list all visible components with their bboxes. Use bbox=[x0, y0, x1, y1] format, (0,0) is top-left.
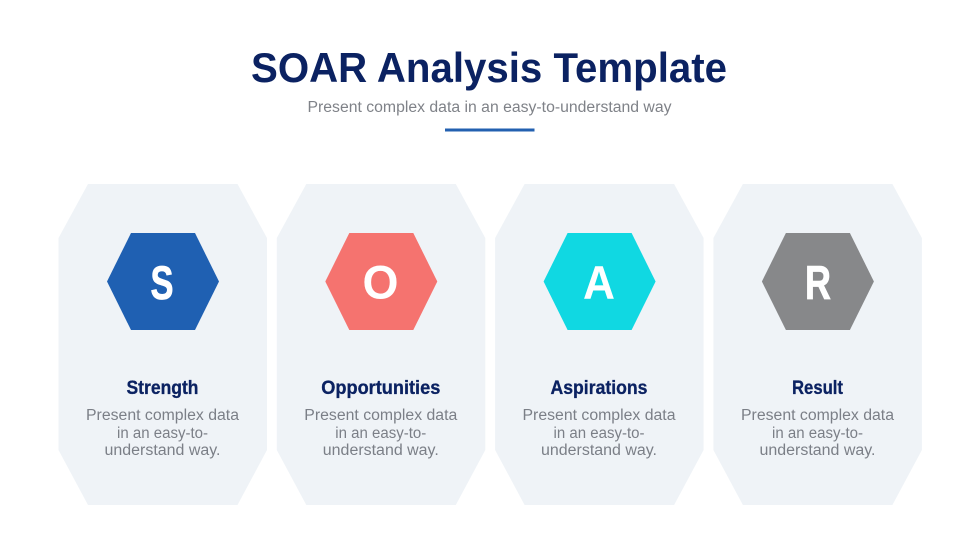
icon: hexagon O: O bbox=[362, 256, 398, 308]
heading: result: Result bbox=[792, 378, 844, 399]
text block: opportunities: Present complex data bbox=[304, 407, 458, 424]
icon: hexagon S bbox=[107, 233, 219, 330]
panel: result bbox=[713, 184, 922, 505]
card background: strength bbox=[58, 184, 267, 505]
text block: result: Present complex data bbox=[741, 407, 894, 424]
text block: opportunities bbox=[304, 407, 458, 459]
card background: result bbox=[713, 184, 922, 505]
icon: hexagon O bbox=[325, 233, 437, 330]
card background: opportunities bbox=[277, 184, 485, 505]
icon: hexagon A bbox=[544, 233, 656, 330]
text block: result: in an easy-to- bbox=[772, 425, 863, 442]
text block: opportunities: in an easy-to- bbox=[335, 425, 426, 442]
panel: aspirations bbox=[495, 184, 704, 505]
text block: aspirations: in an easy-to- bbox=[554, 425, 644, 442]
text block: strength bbox=[86, 407, 239, 459]
text block: strength: understand way. bbox=[104, 442, 220, 459]
text block: result: understand way. bbox=[760, 442, 876, 459]
text block: aspirations: Present complex data bbox=[522, 407, 676, 424]
subtitle: Present complex data in an easy-to-understand way bbox=[308, 99, 672, 116]
heading: opportunities: Opportunities bbox=[321, 378, 440, 399]
icon: hexagon A: A bbox=[583, 256, 615, 309]
text block: opportunities: understand way. bbox=[323, 442, 439, 459]
heading: strength: Strength bbox=[126, 378, 198, 399]
panel: opportunities bbox=[277, 184, 485, 505]
icon: hexagon R bbox=[762, 233, 874, 330]
card background: aspirations bbox=[495, 184, 704, 505]
title underline bbox=[445, 128, 534, 132]
icon: hexagon S: S bbox=[150, 256, 174, 309]
text block: strength: in an easy-to- bbox=[117, 425, 208, 442]
icon: hexagon R: R bbox=[805, 256, 831, 309]
heading: aspirations: Aspirations bbox=[550, 378, 648, 399]
panel: strength bbox=[58, 184, 267, 505]
title: SOAR Analysis Template bbox=[251, 44, 727, 91]
text block: aspirations bbox=[522, 407, 676, 459]
text block: strength: Present complex data bbox=[86, 407, 239, 424]
text block: aspirations: understand way. bbox=[541, 442, 657, 459]
text block: result bbox=[741, 407, 894, 459]
